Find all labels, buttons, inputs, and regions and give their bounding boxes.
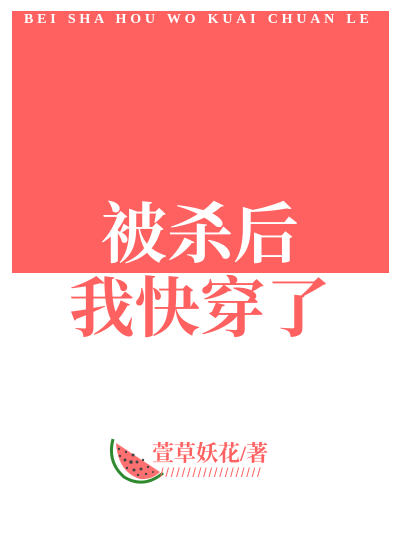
- title line 2: 我快穿了: [69, 256, 331, 350]
- title line 1: 被杀后: [101, 181, 299, 276]
- author name: 萱草妖花/著: [152, 441, 268, 466]
- panel: red cover block: [12, 11, 389, 273]
- pinyin subtitle: BEI SHA HOU WO KUAI CHUAN LE: [24, 12, 373, 27]
- decorative slash row: ///////////////////: [160, 465, 262, 480]
- icon: watermelon slice: [110, 438, 164, 484]
